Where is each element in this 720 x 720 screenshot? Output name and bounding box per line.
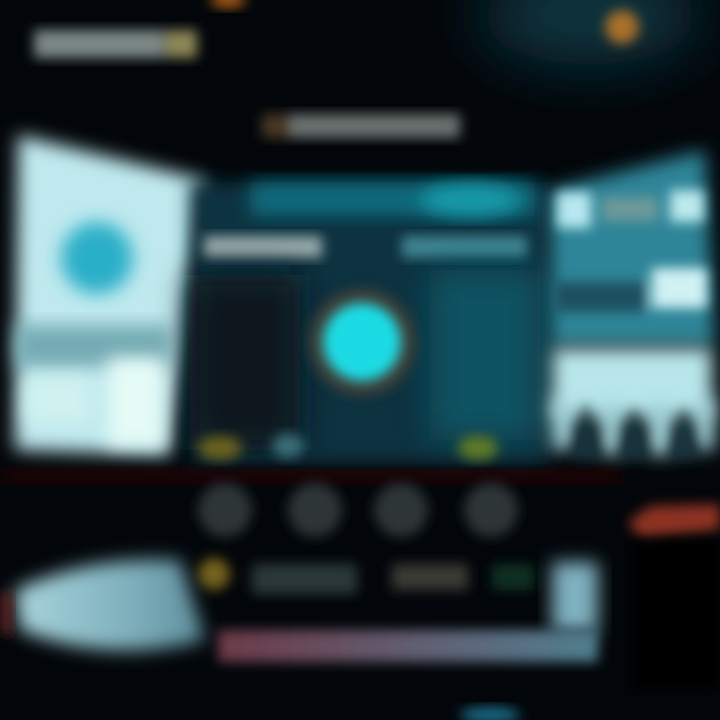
gauge ring bbox=[309, 289, 415, 395]
panel: center bbox=[190, 182, 548, 464]
red divider strip bbox=[0, 470, 620, 482]
red corner shape bbox=[628, 504, 720, 538]
icon: left panel circle bbox=[61, 222, 133, 294]
right chart gaps bbox=[572, 400, 698, 460]
panel: left bbox=[15, 135, 205, 455]
yellow marker right bbox=[458, 436, 498, 460]
panel: bottom left bbox=[15, 559, 205, 650]
header logo text bbox=[34, 30, 197, 58]
black corner block bbox=[630, 540, 720, 690]
top-right glow bbox=[480, 0, 700, 65]
red accent left bbox=[0, 592, 12, 634]
icon: top-right orange circle bbox=[605, 10, 639, 44]
left panel block two bbox=[108, 358, 164, 446]
left panel block one bbox=[25, 378, 90, 423]
center right text bbox=[402, 236, 527, 258]
gauge core bbox=[323, 303, 401, 381]
right chart columns bbox=[552, 400, 714, 455]
center left text bbox=[204, 236, 322, 258]
footer blue glow bbox=[460, 707, 520, 720]
left panel band bbox=[16, 325, 171, 367]
heading bbox=[262, 114, 460, 138]
center top highlight bbox=[420, 184, 520, 216]
right lower chart bbox=[552, 348, 712, 418]
center panel top band bbox=[250, 182, 535, 216]
icon: top orange marker bbox=[210, 0, 246, 8]
row of circles bbox=[198, 483, 518, 537]
small marker bbox=[272, 434, 304, 458]
bottom row items bbox=[198, 558, 534, 594]
panel: bottom right bbox=[552, 562, 598, 632]
panel: right bbox=[550, 150, 715, 460]
center lower right tint bbox=[430, 270, 540, 440]
pink band bbox=[218, 630, 598, 662]
center lower left shade bbox=[190, 275, 300, 450]
yellow marker left bbox=[198, 436, 242, 460]
right middle tiles bbox=[555, 268, 707, 312]
right top tiles bbox=[557, 190, 704, 228]
